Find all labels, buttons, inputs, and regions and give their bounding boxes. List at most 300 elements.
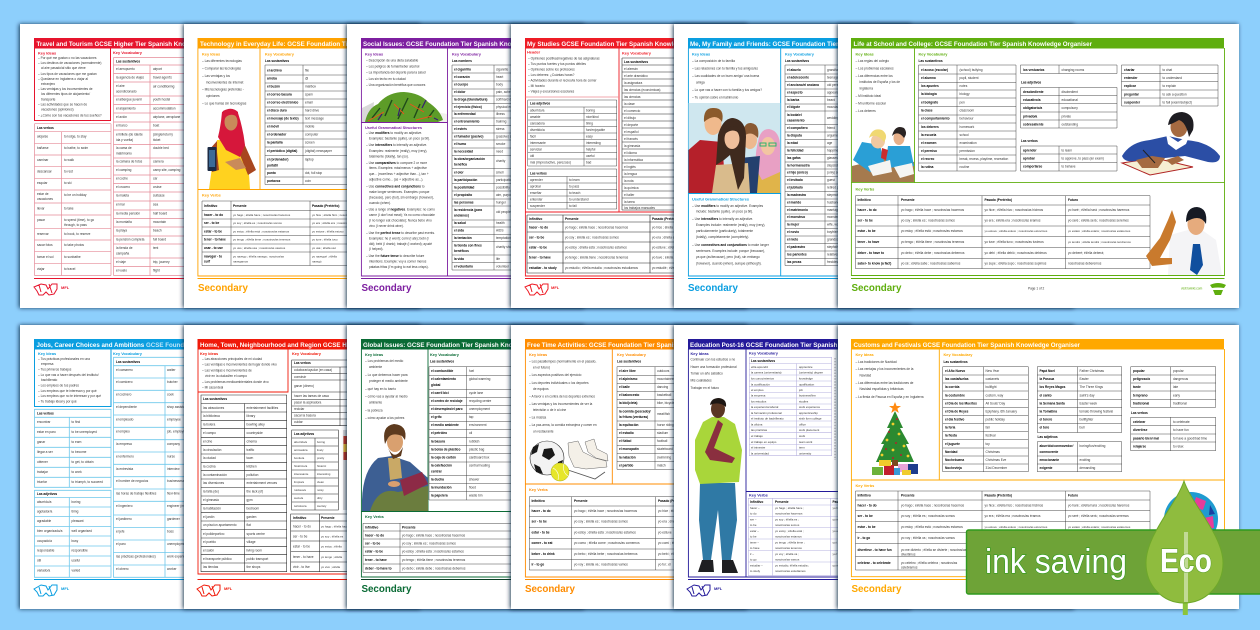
- key verbs table: Pasado (Pretérito): [312, 204, 339, 208]
- key vocabulary table: benéficos: [454, 249, 469, 253]
- key verbs table: Key Verbs: [365, 514, 384, 519]
- nouns table: la bolera: [203, 422, 215, 426]
- key vocabulary table: la natación: [619, 456, 636, 460]
- key vocabulary table: flexi-time: [167, 492, 180, 496]
- key ideas list: – Opiniones positivas/negativas de las asignaturas: [528, 56, 600, 60]
- key vocabulary table: la pensión completa: [116, 238, 145, 242]
- verbs table: obtener: [37, 460, 49, 464]
- organiser frame: [525, 48, 899, 276]
- adjectives table: histórico/a: [294, 464, 308, 468]
- vocabulary table A: Christmas Eve: [986, 458, 1006, 462]
- panel: Jobs, Career Choices and Ambitions organiser: [20, 325, 421, 609]
- key ideas list: – La importancia del deporte para la salud: [366, 70, 426, 74]
- vocabulary table C and verbs: relajarse: [1133, 444, 1146, 448]
- vocabulary table C and verbs: early: [1173, 393, 1180, 397]
- adjectives table: boring: [317, 440, 325, 444]
- key ideas list: Continuar con los estudios o no: [690, 358, 735, 362]
- vocabulary verbs table: Key Vocabulary: [292, 351, 322, 356]
- vocabulary heading and first table: permission: [960, 149, 975, 153]
- vocabulary table C and verbs: to celebrate: [1173, 420, 1190, 424]
- adjectives table: interesting: [317, 472, 331, 476]
- adjectives table: well organised: [72, 529, 92, 533]
- vocabulary table C and verbs: Las verbos: [1131, 411, 1148, 415]
- key vocabulary table: el medio ambiente: [431, 423, 459, 427]
- key vocabulary table: el albergue juvenil: [116, 98, 142, 102]
- nouns table: bowling alley: [246, 422, 265, 426]
- key vocabulary table: la comida (pescado)/: [619, 410, 651, 414]
- adjectives table: pretty: [317, 456, 325, 460]
- key ideas list: Trabajar en el futuro: [690, 386, 719, 390]
- key verbs table: yo estoy ; él/ella está ; nosotros/as estamos: [901, 525, 963, 529]
- key verbs table: yo hago ; él/ella hace ; nosotros/as hacemos: [565, 226, 628, 230]
- nouns table: pollution: [246, 473, 259, 477]
- key vocabulary table: la bici(cleta): [619, 401, 637, 405]
- key verbs table: hacer - to do: [858, 504, 877, 508]
- key ideas list: Key Ideas: [202, 52, 220, 56]
- adjectives table: aburrido/a: [530, 108, 545, 112]
- key ideas list: – La fiesta de Pascua en España y en Inglaterra: [856, 395, 924, 399]
- middle tables: sobresaliente: [1023, 122, 1044, 126]
- key vocabulary table: charity shop: [496, 245, 513, 249]
- key vocabulary table: global: [431, 383, 440, 387]
- vocabulary table A: la feria: [945, 426, 956, 430]
- key vocabulary table: la equitación: [619, 423, 639, 427]
- key vocabulary table: work experience: [799, 405, 820, 409]
- key vocabulary table: el estrés: [454, 127, 467, 131]
- key ideas list: Key Ideas: [692, 52, 710, 56]
- vocabulary table A: Nochevieja: [945, 466, 962, 470]
- nouns table: [201, 395, 287, 572]
- key verbs table: yo estudio; él/ella estudia ;: [775, 564, 809, 568]
- key vocabulary table: unemployment: [469, 407, 490, 411]
- vocabulary verbs table: Las verbos: [294, 361, 311, 365]
- key vocabulary table: oil: [469, 431, 472, 435]
- vocabulary heading and first table: pen: [960, 100, 965, 104]
- key ideas list: – Comparar las tecnologías: [202, 66, 241, 70]
- key ideas list: – A favor o en contra de los deportes extremos: [529, 394, 595, 398]
- key vocabulary table: [113, 50, 190, 276]
- title bar: [851, 339, 1224, 350]
- key verbs table: Futuro: [1068, 494, 1078, 498]
- key vocabulary table: file: [305, 68, 309, 72]
- vocabulary heading and first table: (school) bullying: [960, 68, 983, 72]
- key vocabulary table: old person: [827, 83, 842, 87]
- vocabulary table B and adjectives: el santo: [1040, 393, 1052, 397]
- vocabulary heading and first table: classroom: [960, 108, 974, 112]
- key verbs table: estar - to be: [293, 544, 310, 548]
- key ideas list: – La música: [529, 416, 546, 420]
- key vocabulary table: air conditioning: [153, 84, 175, 88]
- key ideas box: – Los empleos que te interesan y por qué: [38, 389, 97, 393]
- vocabulary table C and verbs: pasarlo bien/ mal: [1133, 436, 1159, 440]
- vocabulary table C and verbs: celebrar: [1133, 420, 1146, 424]
- panel: Customs and Festivals organiser: [838, 325, 1239, 609]
- vocabulary table C and verbs: temprano: [1133, 393, 1148, 397]
- key ideas list: un restaurante: [533, 430, 554, 434]
- vocabulary table C and verbs: traditional: [1173, 401, 1187, 405]
- key verbs table: to have: [750, 546, 760, 550]
- vocabulary heading and first table: el examen: [921, 141, 936, 145]
- key verbs table: [529, 487, 690, 570]
- key vocabulary table: la cámara de fotos: [116, 160, 143, 164]
- verbs table: to rest: [64, 170, 73, 174]
- key verbs table: yo sé ; él/ella sabe ; nosotros/as sabemos: [901, 262, 961, 266]
- key vocabulary table: el cigarrillo: [454, 68, 471, 72]
- useful grammatical structures: include: bastante (quite), un poco (a bit).: [696, 210, 753, 214]
- key verbs table: ser - to be: [529, 236, 544, 240]
- key ideas list: Key Ideas: [690, 351, 709, 356]
- key vocabulary table: nurse: [167, 454, 175, 458]
- key vocabulary table: match: [657, 464, 666, 468]
- vocabulary table B and adjectives: el torero: [1040, 418, 1052, 422]
- adjectives table: noisy: [317, 488, 324, 492]
- key vocabulary table: los parientes: [787, 252, 807, 256]
- nouns table: countryside: [246, 431, 263, 435]
- key ideas box: – Los empleos que no te interesan y por qué: [38, 394, 101, 398]
- key vocabulary table: el padrastro: [787, 245, 805, 249]
- key vocabulary table: husband: [827, 200, 839, 204]
- key vocabulary table: el vuelo: [116, 268, 127, 272]
- illustration: family portrait: [688, 103, 780, 193]
- key verbs table: Pas: [832, 500, 838, 504]
- adjectives table: agradable: [37, 519, 51, 523]
- verbs table: entender: [530, 198, 544, 202]
- vocabulary heading and first table: notes: [960, 84, 968, 88]
- key verbs table: Presente: [321, 516, 335, 520]
- key vocabulary table: el marido: [787, 200, 801, 204]
- vocabulary table B and adjectives: el toro: [1040, 426, 1049, 430]
- key ideas list: proteger el medio ambiente: [369, 379, 408, 383]
- key vocabulary table: la residencia (para: [454, 208, 482, 212]
- key vocabulary table: flight: [153, 268, 160, 272]
- nouns table: la biblioteca: [203, 414, 220, 418]
- key vocabulary table: el cocinero: [116, 392, 132, 396]
- key verbs table: estar - to be: [365, 550, 383, 554]
- key verbs table: Infinitivo: [204, 204, 217, 208]
- useful grammatical structures: particularmente (particularly), totalmente: [696, 229, 753, 233]
- key vocabulary table: freckles: [827, 260, 838, 264]
- key vocabulary table: (single/return): [153, 132, 173, 136]
- key verbs table: navegar - to: [204, 254, 222, 258]
- key ideas box: [34, 349, 111, 406]
- key vocabulary table: la bolsa de plástico: [431, 448, 460, 452]
- key vocabulary table: sea: [153, 202, 158, 206]
- key vocabulary table: el móvil: [267, 124, 279, 128]
- key vocabulary table: hunger: [496, 200, 507, 204]
- verbs table: [528, 169, 617, 209]
- key vocabulary table: [452, 52, 525, 270]
- key verbs table: Futuro: [1068, 198, 1078, 202]
- key verbs table: ser - to be: [293, 534, 308, 538]
- panel: Travel and Tourism organiser: [20, 24, 421, 308]
- useful grammatical structures: Examples include: realmente (really), muy (very),: [696, 223, 765, 227]
- vocabulary table C and verbs: dangerous: [1173, 377, 1188, 381]
- vocabulary table A: public holiday: [986, 418, 1005, 422]
- verbs table: Las verbos: [37, 412, 54, 416]
- nouns table: el campo: [203, 431, 216, 435]
- panel: My Studies organiser: [511, 24, 912, 308]
- verbs table: llevar: [37, 206, 46, 210]
- useful grammatical structures: – Use the future tense to describe future: [366, 254, 425, 258]
- right table: to fail (exam/subject): [1162, 100, 1192, 104]
- key vocabulary table: businessman: [167, 479, 186, 483]
- key ideas list: – Lo que debemos hacer para: [365, 373, 408, 377]
- key vocabulary table: el francés: [624, 137, 638, 141]
- key vocabulary table: apprentice: [799, 365, 813, 369]
- key vocabulary table: matrimonio: [116, 152, 132, 156]
- key verbs table: to study: [750, 569, 761, 573]
- vocabulary verbs table: colaborar/ayudar (en casa): [294, 368, 332, 372]
- key verbs table: ser - to be: [365, 542, 380, 546]
- vocabulary heading and first table: homework: [960, 125, 975, 129]
- key vocabulary table: sixth form college: [799, 416, 822, 420]
- key vocabulary table: el dolor: [454, 90, 466, 94]
- key vocabulary table: gardener: [167, 517, 181, 521]
- key vocabulary table: el ingeniero: [116, 504, 133, 508]
- key ideas box: los diferentes tipos de alojamiento/: [41, 92, 90, 96]
- key vocabulary table: work experience: [167, 554, 190, 558]
- key vocabulary table: [429, 352, 525, 500]
- title bar: Me, My Family and Friends: GCSE Foundation Tier Spanish Knowledge Organiser: [690, 41, 930, 48]
- key vocabulary table: laptop: [305, 158, 314, 162]
- key ideas box: [34, 48, 110, 120]
- verbs table: reservar: [37, 232, 50, 236]
- key vocabulary table: camp site, camping: [153, 168, 181, 172]
- key ideas box: empresa: [41, 362, 54, 366]
- key vocabulary table: unemployment: [167, 542, 188, 546]
- key ideas list: [200, 351, 277, 390]
- key vocabulary table: el obrero: [116, 567, 129, 571]
- middle tables: Las adjetivos: [1021, 80, 1041, 84]
- adjectives table: interesante: [294, 472, 309, 476]
- key vocabulary table: el novio: [787, 230, 799, 234]
- verbs table: Las verbos: [37, 126, 54, 130]
- key vocabulary table: el trimestre: [751, 446, 766, 450]
- organiser frame: [361, 349, 735, 577]
- key verbs table: Infinitivo: [293, 516, 306, 520]
- adjectives table: fun/enjoyable: [586, 128, 605, 132]
- key vocabulary table: cigarette: [496, 68, 508, 72]
- key verbs table: yo debo ; él/ella debe ; nosotros/as debemos: [402, 566, 466, 570]
- key vocabulary table: el aeropuerto: [116, 67, 135, 71]
- adjectives table: divertido/a: [530, 128, 545, 132]
- vocabulary table B and adjectives: conmovente: [1040, 450, 1059, 454]
- key vocabulary table: la formación profesional: [751, 411, 782, 415]
- verbs table: [34, 124, 111, 276]
- key verbs table: estar - to be: [529, 246, 547, 250]
- key vocabulary table: el jefe: [116, 530, 125, 534]
- key vocabulary table: volunteer: [496, 264, 510, 268]
- leaf icon with Eco label: [1146, 481, 1223, 615]
- adjectives table: varied: [72, 568, 80, 572]
- key vocabulary table: engineer (mechanical): [167, 504, 199, 508]
- key vocabulary table: team work: [799, 440, 813, 444]
- verbs table: viajar: [37, 267, 46, 271]
- key vocabulary table: football: [657, 439, 668, 443]
- key vocabulary table: stepmother: [827, 193, 844, 197]
- key verbs table: [291, 514, 360, 572]
- nouns table: la ciudad: [203, 456, 216, 460]
- useful grammatical structures: Examples: he (I went); comí (I ate); bebí (I: [369, 236, 429, 240]
- key vocabulary table: Key Vocabulary: [265, 52, 295, 56]
- verbs table: through, to pass: [64, 223, 87, 227]
- key vocabulary table: el/la aprendiz: [751, 365, 769, 369]
- useful grammatical structures: vino (I never drink wine).: [369, 224, 404, 228]
- key ideas list: [527, 50, 600, 94]
- key vocabulary table: la edad: [787, 141, 798, 145]
- key vocabulary table: aim, purpose: [496, 193, 515, 197]
- key verbs table: hacer - to do: [529, 226, 548, 230]
- key verbs table: yo e: [832, 529, 838, 533]
- key vocabulary table: el instituto de bachillerato: [751, 416, 784, 420]
- adjectives table: clean: [317, 480, 324, 484]
- key vocabulary table: el paro: [116, 542, 126, 546]
- key verbs table: Presente: [565, 217, 579, 221]
- vocabulary table A: 31st December: [986, 466, 1008, 470]
- adjectives table: tiring: [72, 510, 79, 514]
- key ideas list: Key Ideas: [529, 352, 547, 357]
- key vocabulary table: cycle lane: [469, 391, 483, 395]
- key vocabulary table: el bigote: [787, 105, 800, 109]
- right table: explicar: [1124, 84, 1137, 88]
- illustration: homeless man seated: [362, 424, 428, 511]
- verbs table: ganar: [37, 440, 46, 444]
- key vocabulary table: [749, 350, 832, 456]
- title bar: Technology in Everyday Life: GCSE Foundation Tier Spanish Knowledge Organiser: [200, 41, 445, 48]
- nouns table: el gimnasio: [203, 498, 219, 502]
- vocabulary table B and adjectives: los Reyes Magos: [1040, 385, 1066, 389]
- key ideas list: – Opiniones sobre los profesores: [528, 68, 575, 72]
- useful grammatical structures: intentions. Example: voy a comer menos: [369, 260, 427, 264]
- key vocabulary table: wedding: [827, 116, 839, 120]
- key verbs table: vivir - to live: [293, 565, 310, 569]
- key vocabulary table: el abuelo: [787, 68, 801, 72]
- nouns table: las atracciones: [203, 406, 225, 410]
- key vocabulary table: el (ordenador): [267, 158, 288, 162]
- vocabulary table A: las castañuelas: [945, 377, 969, 381]
- key vocabulary table: boyfriend: [827, 230, 840, 234]
- adjectives table: útil: [530, 154, 534, 158]
- key verbs table: navegamos: [233, 260, 248, 264]
- key vocabulary table: las horas de trabajo flexibles: [116, 492, 157, 496]
- key ideas list: – la pobreza: [365, 408, 383, 412]
- key vocabulary table: la hermanastra: [787, 164, 810, 168]
- key vocabulary table: double bed: [153, 146, 169, 150]
- useful grammatical structures: Examples: bastante (quite), un poco (a bit).: [369, 136, 430, 140]
- key vocabulary table: el dibujo: [624, 116, 636, 120]
- adjectives table: [528, 100, 617, 166]
- key verbs table: yo hice ; él/ella hizo ; nosotros/as hicimos: [984, 504, 1044, 508]
- key vocabulary table: el adolescente: [787, 76, 809, 80]
- key verbs table: nosotros/as hacemos: [775, 512, 803, 516]
- adjectives table: agotador/a: [37, 510, 52, 514]
- key vocabulary table: la universidad: [751, 451, 769, 455]
- key vocabulary table: el alojamiento: [116, 106, 136, 110]
- vocabulary table A: el Día de los Muertos: [945, 401, 977, 405]
- key ideas list: inconvenientes de Internet: [206, 80, 244, 84]
- title bar: My Studies GCSE Foundation Tier Spanish Knowledge Organiser: [527, 41, 719, 48]
- key vocabulary table: Las nombres: [452, 59, 472, 63]
- useful grammatical structures: – Use modifiers to modify an adjective.: [366, 131, 422, 135]
- key vocabulary table: Key Vocabulary: [113, 351, 143, 356]
- key vocabulary table: (digital) newspaper: [305, 149, 333, 153]
- nouns table: traffic: [246, 448, 255, 452]
- key vocabulary table: benéfica: [454, 162, 467, 166]
- footer: Secondary: Secondary: [525, 584, 575, 595]
- key vocabulary table: heart: [496, 75, 503, 79]
- key ideas list: televisión o de ir al cine: [533, 408, 566, 412]
- key vocabulary table: life: [496, 257, 500, 261]
- key ideas list: Hacer una formación profesional: [690, 365, 737, 369]
- key vocabulary table: trip, journey: [153, 260, 170, 264]
- vocabulary heading and first table: el permiso: [921, 149, 937, 153]
- key ideas list: – cómo vas a ayudar al medio: [365, 394, 408, 398]
- middle tables: comportarse: [1023, 164, 1043, 168]
- key verbs table: yo como ; él/ella come ; nosotros/as comemos: [574, 541, 640, 545]
- key ideas box: transporte: [41, 98, 56, 102]
- key vocabulary table: el nieto: [787, 238, 798, 242]
- key vocabulary table: la pantalla: [267, 140, 283, 144]
- nouns table: garden: [246, 515, 257, 519]
- key vocabulary table: la nota: [624, 179, 634, 183]
- key vocabulary table: el trabajo en equipo: [751, 440, 777, 444]
- verbs table: llegar a ser: [37, 450, 54, 454]
- key vocabulary table: el disco duro: [267, 108, 287, 112]
- key verbs table: yo deberé; él/ella deberá;: [1068, 251, 1104, 255]
- key vocabulary table: la entrevista: [116, 467, 133, 471]
- key ideas list: – Las atracciones principales de mi ciudad: [202, 357, 262, 361]
- key verbs table: yo estuve: [658, 530, 672, 534]
- adjectives table: nice/kind: [586, 115, 599, 119]
- key verbs table: yo bebo ; él/ella bebe ; nosotros/as bebemos: [574, 552, 638, 556]
- key vocabulary table: cardboard box: [469, 456, 490, 460]
- key vocabulary table: la tienda con fines: [454, 244, 482, 248]
- key ideas list: [365, 52, 426, 87]
- key ideas list: vivir en la ciudad/en el campo: [205, 374, 247, 378]
- key vocabulary table: el estadio: [619, 431, 634, 435]
- vocabulary verbs table: pasar la aspiradora: [294, 400, 322, 404]
- key vocabulary table: soft/hard drug: [496, 98, 516, 102]
- key verbs table: yo debí ; él/ella debió ; nosotros/as debimos: [984, 251, 1047, 255]
- vocabulary heading and first table: la biología: [921, 92, 937, 96]
- vocabulary table A: custom, way: [986, 393, 1004, 397]
- key vocabulary table: el carril bici: [431, 391, 449, 395]
- title bar: [361, 38, 735, 48]
- key vocabulary table: el correo basura: [267, 92, 292, 96]
- nouns table: cinema: [246, 440, 257, 444]
- vocabulary table C and verbs: peligroso/a: [1133, 377, 1150, 381]
- key vocabulary table: los trabajos manuales: [624, 206, 655, 210]
- key vocabulary table: Las sustantivos: [430, 360, 454, 364]
- key vocabulary table: Las sustantivos: [116, 60, 140, 64]
- vocabulary verbs table: hacer las tareas de casa: [294, 394, 329, 398]
- key ideas list: Key Ideas: [856, 352, 874, 357]
- verbs table: Las verbos: [530, 172, 547, 176]
- useful grammatical structures: patatas fritas (I'm going to eat less crisps).: [369, 265, 429, 269]
- vocabulary heading and first table: el bolígrafo: [921, 100, 938, 104]
- key ideas list: Key Ideas: [365, 52, 383, 56]
- useful grammatical structures: Useful Grammatical Structures: [365, 125, 422, 130]
- vocabulary verbs table: ganar (dinero): [294, 384, 314, 388]
- verbs table: to travel: [64, 267, 76, 271]
- vocabulary table B and adjectives: aburrido/conmovedor/: [1040, 444, 1073, 448]
- vocabulary table A: All Souls' Day: [986, 401, 1005, 405]
- key vocabulary table: la madrastra: [787, 193, 806, 197]
- key verbs table: yo estoy ; él/ella: [321, 544, 342, 548]
- key verbs table: yo tengo ; él/ella tiene ; nosotros/as tenemos: [565, 256, 629, 260]
- key verbs table: ir –: [750, 552, 754, 556]
- key vocabulary table: ancianos): [454, 214, 469, 218]
